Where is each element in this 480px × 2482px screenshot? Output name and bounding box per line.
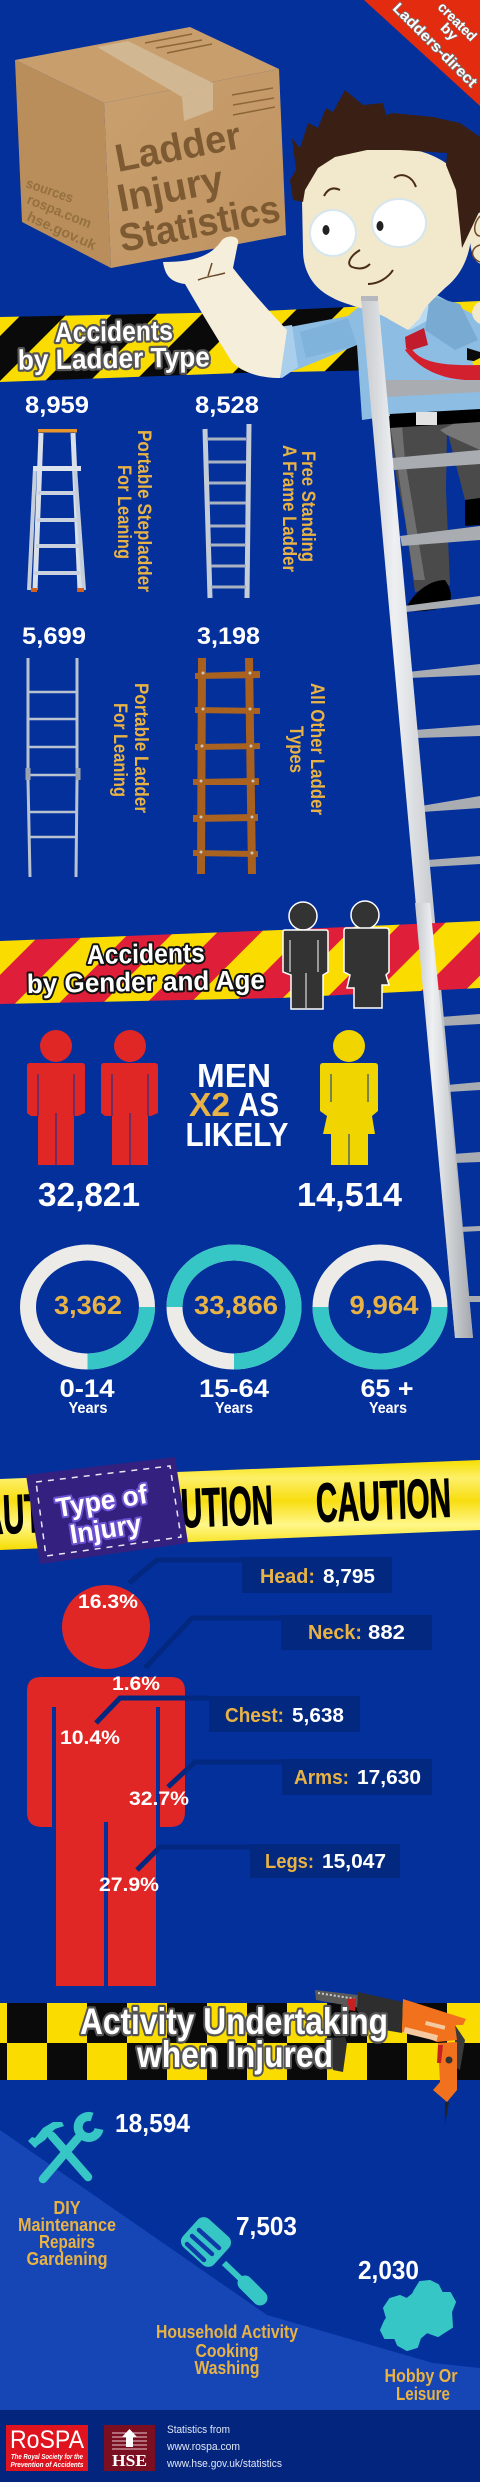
banner: accidents by ladder type tape: Accidents xyxy=(55,315,173,348)
footer xyxy=(0,2410,480,2482)
figure details xyxy=(38,1074,368,1165)
face xyxy=(302,146,472,330)
label: chest xyxy=(225,1705,344,1727)
percentages on body: 1.6% xyxy=(112,1674,160,1695)
activity: hobby xyxy=(358,2255,458,2404)
percentages on body: 27.9% xyxy=(99,1875,159,1896)
label: arms: Arms: xyxy=(294,1767,349,1789)
text: sources xyxy=(166,2424,282,2470)
banner: caution tape xyxy=(0,1460,480,1550)
stat: portable ladder for leaning xyxy=(22,623,151,877)
heading: activity undertaking when injured: Activity Undertaking xyxy=(80,2001,388,2042)
background: lower lighter hill xyxy=(0,2130,480,2410)
label: legs: Legs: xyxy=(265,1851,314,1873)
banner: accidents by gender and age tape xyxy=(0,921,480,1004)
activity: DIY: 18,594 xyxy=(115,2108,191,2138)
stat: portable ladder for leaning: For Leaning xyxy=(109,703,130,797)
cardboard box: hse.gov.uk xyxy=(25,208,99,253)
banner: accidents by gender and age tape: Accidents xyxy=(87,938,205,970)
label: head: Head: xyxy=(260,1566,315,1588)
text: sources: Statistics from xyxy=(167,2424,230,2436)
callout: men x2 as likely: X2 xyxy=(189,1086,230,1123)
stat: free standing a frame ladder: 8,528 xyxy=(195,392,259,419)
corner ribbon: created by Ladders-direct: by xyxy=(438,19,462,44)
corner ribbon: created by Ladders-direct xyxy=(364,0,480,106)
character: man on ladder xyxy=(163,90,480,611)
icon: spatula xyxy=(178,2214,260,2298)
banner: activity undertaking checkerboard xyxy=(0,2003,480,2080)
arm and hand xyxy=(163,236,287,378)
hair xyxy=(290,90,480,248)
banner: accidents by gender and age tape: by Gender and Age xyxy=(27,965,265,999)
activity: household: Washing xyxy=(194,2358,260,2378)
activity: DIY: DIY xyxy=(54,2198,80,2218)
label boxes and connectors xyxy=(209,1557,432,1878)
activity: DIY: Repairs xyxy=(39,2232,95,2252)
icon: puzzle piece xyxy=(381,2281,455,2350)
activity: hobby: 2,030 xyxy=(358,2255,419,2285)
banner: accidents by ladder type tape: by Ladder Type xyxy=(18,341,210,376)
icon: dark man and woman xyxy=(283,901,389,1009)
logo: RoSPA xyxy=(6,2425,88,2471)
logo: HSE: HSE xyxy=(112,2451,147,2470)
stat: portable stepladder xyxy=(25,392,154,593)
eyebrows, nose and mouth xyxy=(324,175,416,284)
icon: drill xyxy=(315,1990,466,2125)
text: sources: www.rospa.com xyxy=(166,2441,240,2453)
label: chest: 5,638 xyxy=(292,1705,344,1727)
donut: 65+ years xyxy=(320,1252,440,1417)
belt xyxy=(390,409,480,428)
donut: 65+ years: 9,964 xyxy=(350,1290,419,1320)
label: neck: 882 xyxy=(368,1622,405,1644)
donut: 15-64 years: Years xyxy=(215,1400,253,1417)
icon: straight ladder xyxy=(205,424,249,598)
heading: activity undertaking when injured xyxy=(80,2001,388,2075)
cardboard box: Injury xyxy=(114,158,227,221)
trousers and shoes xyxy=(388,412,480,611)
logo: HSE xyxy=(104,2425,155,2471)
activity: DIY: Gardening xyxy=(26,2249,108,2269)
activity: hobby: Hobby Or xyxy=(384,2366,458,2386)
callout: men x2 as likely: MEN xyxy=(197,1057,271,1094)
activity: household: Household Activity xyxy=(156,2322,298,2342)
eyes xyxy=(310,199,426,256)
label: legs: 15,047 xyxy=(322,1851,386,1873)
donut: 65+ years: 65 + xyxy=(360,1375,414,1403)
icon: hammer and wrench xyxy=(28,2116,99,2179)
icon: wooden ladder xyxy=(193,658,260,874)
label: chest: Chest: xyxy=(225,1705,284,1727)
stat: men total: 32,821 xyxy=(38,1176,140,1213)
heading: activity undertaking when injured: when Injured xyxy=(136,2034,333,2075)
cardboard box: Statistics xyxy=(116,188,284,261)
donut: 15-64 years xyxy=(174,1252,294,1417)
cardboard box: Ladder xyxy=(112,114,244,181)
banner: caution tape: CAUTION xyxy=(137,1474,274,1541)
label: head xyxy=(260,1566,375,1588)
stat: all other ladder types: All Other Ladder xyxy=(306,683,327,816)
label: legs xyxy=(265,1851,386,1873)
donut: 65+ years: Years xyxy=(369,1400,407,1417)
cardboard box xyxy=(15,27,286,268)
rungs xyxy=(384,380,480,1302)
icon: extension ladder xyxy=(28,658,78,877)
figure: injury body xyxy=(27,1585,185,1986)
stat: portable stepladder: Portable Stepladder xyxy=(133,430,154,593)
activity: household: Cooking xyxy=(196,2341,258,2361)
activity: hobby: Leisure xyxy=(396,2384,450,2404)
stat: all other ladder types: 3,198 xyxy=(197,623,260,650)
label: arms xyxy=(294,1767,421,1789)
icon: stepladder xyxy=(29,429,84,592)
donut: 15-64 years: 15-64 xyxy=(199,1375,269,1403)
donut: 0-14 years: Years xyxy=(68,1400,108,1417)
stat: all other ladder types: Types xyxy=(285,726,306,773)
label: arms: 17,630 xyxy=(357,1767,421,1789)
cardboard box: rospa.com xyxy=(25,191,94,231)
logo: RoSPA: The Royal Society for the xyxy=(11,2454,83,2461)
donut: 15-64 years: 33,866 xyxy=(194,1290,278,1320)
corner ribbon: created by Ladders-direct: Ladders-direct xyxy=(389,0,480,91)
stat: free standing a frame ladder xyxy=(195,392,318,598)
logo: RoSPA: RoSPA xyxy=(10,2426,84,2454)
label: neck xyxy=(308,1622,405,1644)
stat: women total: 14,514 xyxy=(297,1176,403,1213)
stat: all other ladder types xyxy=(193,623,327,874)
stat: portable stepladder: 8,959 xyxy=(25,392,89,419)
activity: DIY: Maintenance xyxy=(18,2215,116,2235)
activity: DIY xyxy=(18,2108,191,2269)
icon: yellow woman xyxy=(320,1030,378,1165)
percentages on body: 10.4% xyxy=(60,1728,120,1749)
glimpse of tape and other hand xyxy=(467,348,480,362)
activity: household xyxy=(156,2211,298,2378)
callout: men x2 as likely: AS xyxy=(238,1086,279,1123)
stat: portable ladder for leaning: Portable Ladder xyxy=(130,683,151,814)
rail xyxy=(361,297,473,1338)
stat: portable stepladder: For Leaning xyxy=(113,465,134,559)
callout: men x2 as likely xyxy=(186,1057,288,1153)
big ladder xyxy=(361,296,480,1338)
banner: accidents by ladder type tape xyxy=(0,301,480,382)
heading patch: type of injury xyxy=(26,1457,188,1564)
callout: men x2 as likely: LIKELY xyxy=(186,1116,288,1153)
heading patch: type of injury: Injury xyxy=(68,1509,143,1550)
donut: 0-14 years: 0-14 xyxy=(60,1375,115,1403)
shirt xyxy=(272,293,480,420)
cardboard box: sources xyxy=(24,175,76,206)
icon: two red men xyxy=(27,1030,158,1165)
percentages on body: 16.3% xyxy=(78,1592,138,1613)
stat: portable ladder for leaning: 5,699 xyxy=(22,623,86,650)
ear xyxy=(470,212,480,264)
percentages on body: 32.7% xyxy=(129,1789,189,1810)
percentages on body xyxy=(60,1592,189,1896)
heading patch: type of injury: Type of xyxy=(54,1479,150,1523)
donut: 0-14 years: 3,362 xyxy=(54,1290,122,1320)
stat: free standing a frame ladder: A Frame Ladder xyxy=(278,445,299,573)
stat: free standing a frame ladder: Free Standing xyxy=(297,451,318,562)
label: head: 8,795 xyxy=(323,1566,375,1588)
text: sources: www.hse.gov.uk/statistics xyxy=(166,2458,282,2470)
ladder section above banner xyxy=(415,903,473,1338)
tie xyxy=(405,328,480,380)
donut: 0-14 years xyxy=(28,1252,147,1417)
logo: RoSPA: Prevention of Accidents xyxy=(10,2462,84,2469)
activity: household: 7,503 xyxy=(236,2211,297,2241)
label: neck: Neck: xyxy=(308,1622,362,1644)
